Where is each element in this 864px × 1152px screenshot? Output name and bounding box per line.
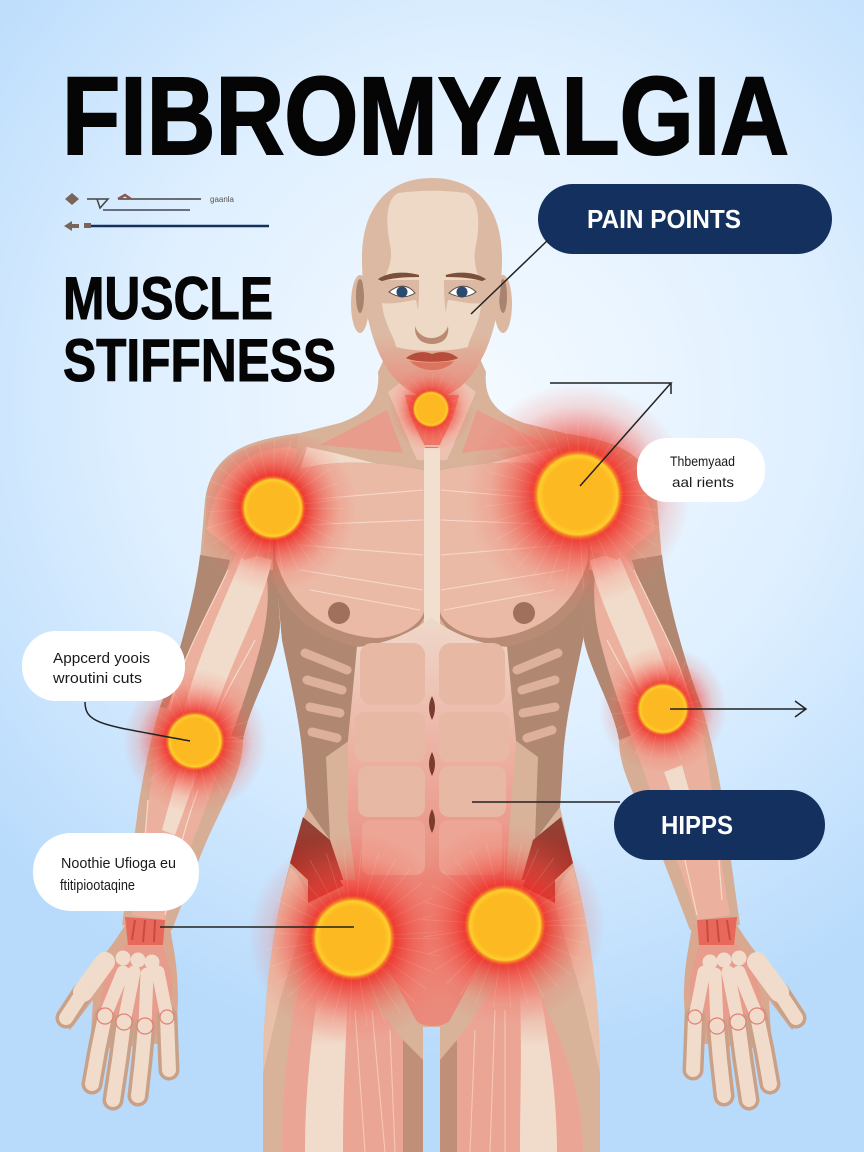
pain point: left shoulder: [205, 436, 350, 586]
pain point: left elbow: [123, 669, 267, 813]
callout: elbow: wroutini cuts: [52, 670, 142, 687]
abdominal muscles: [305, 617, 558, 890]
subtitle: MUSCLE: [63, 265, 273, 332]
leader arrow: right elbow: [670, 701, 806, 717]
body figure: [58, 178, 804, 1152]
subtitle: STIFFNESS: [63, 327, 336, 394]
pain point: left hip: [248, 833, 458, 1043]
left arm and hand: [58, 433, 330, 1100]
decorative legend icons: gaanla: [210, 195, 235, 204]
leader line: hips: [472, 801, 620, 803]
hips pill: [614, 790, 825, 860]
hip shadows and pelvis: [263, 817, 600, 1073]
callout: elbow: [22, 631, 185, 701]
callout: wrist: ftitipiootaqine: [60, 877, 135, 894]
pain point: right hip: [405, 825, 605, 1025]
right arm and hand: [532, 433, 804, 1100]
callout: wrist: [33, 833, 199, 911]
decorative legend icons: [64, 193, 269, 231]
pain point: right shoulder: [466, 383, 690, 607]
brows, eyes: [380, 274, 419, 280]
leader line: face: [471, 240, 548, 314]
chest muscles: [273, 447, 591, 648]
upper torso brown sides: [276, 575, 588, 840]
hips pill: HIPPS: [661, 810, 733, 840]
subtitle: [63, 265, 336, 394]
leg muscles: [282, 960, 583, 1152]
callout: shoulder: aal rients: [672, 474, 734, 490]
callout: shoulder: [637, 438, 765, 502]
leader line: wrist: [160, 926, 354, 928]
leader arrow: shoulder: [550, 383, 671, 486]
pain points pill: PAIN POINTS: [587, 204, 741, 234]
neck and trapezius muscles: [320, 380, 543, 484]
callout: shoulder: Thbemyaad: [670, 453, 735, 469]
callout: wrist: Noothie Ufioga eu: [61, 855, 176, 872]
head: [351, 178, 512, 398]
callout: elbow: Appcerd yoois: [53, 650, 150, 667]
pain point: right elbow: [599, 645, 727, 773]
torso and legs: [263, 350, 600, 1152]
leader line: elbow: [85, 702, 190, 741]
nose and lips: [414, 270, 449, 338]
pain points pill: [538, 184, 832, 254]
pain point glows: [123, 367, 727, 1043]
pain point: neck: [389, 367, 473, 451]
